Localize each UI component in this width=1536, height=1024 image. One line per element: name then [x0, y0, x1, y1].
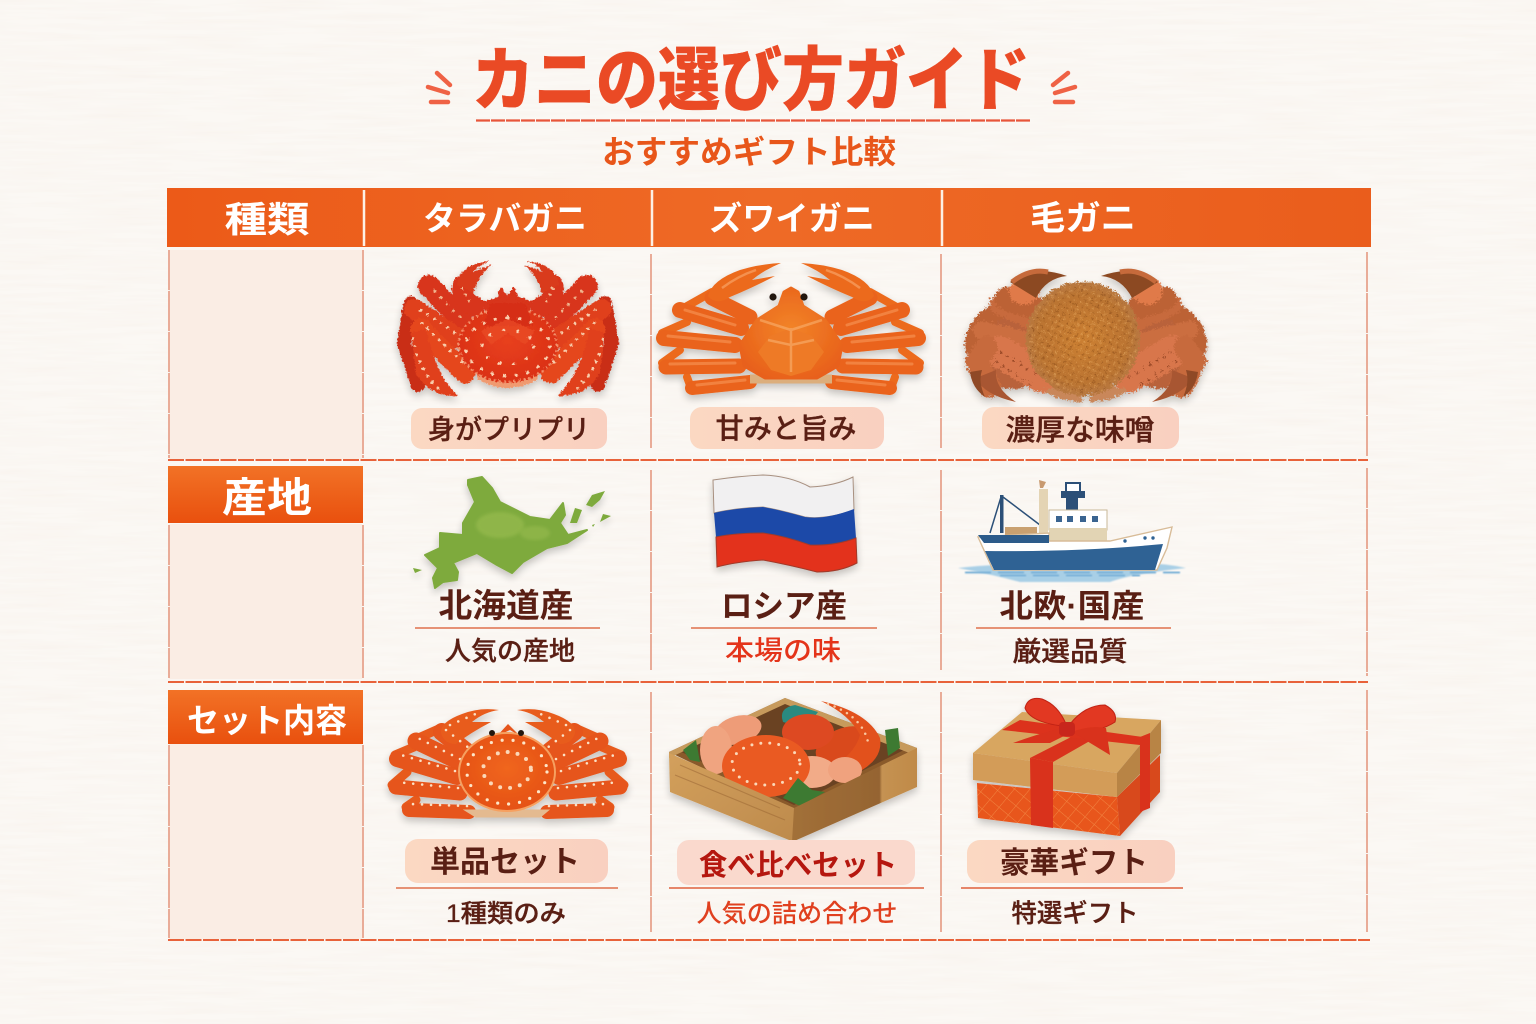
pill: 甘みと旨み: 甘みと旨み	[716, 413, 856, 444]
icon: king crab	[403, 260, 611, 395]
icon: left sparkle	[428, 73, 450, 102]
pill: 甘みと旨み	[690, 407, 884, 449]
text: 北海道産: 北海道産	[438, 587, 574, 624]
pill: 単品セット	[396, 839, 618, 928]
icon: Hokkaido map	[413, 477, 611, 588]
pill: 食べ比べセット	[669, 840, 924, 928]
comparison table frame	[168, 250, 1370, 940]
header: 毛ガニ: 毛ガニ	[1030, 200, 1136, 238]
text: 北欧・国産: 北欧·国産	[1000, 588, 1144, 624]
icon: gift box	[973, 698, 1161, 836]
pill: 単品セット: 単品セット	[430, 846, 580, 879]
text: 北欧・国産	[976, 588, 1171, 667]
pill: 食べ比べセット: 人気の詰め合わせ	[696, 900, 898, 928]
pill: 身がプリプリ: 身がプリプリ	[428, 415, 590, 445]
row label: セット内容: セット内容	[187, 702, 347, 739]
pill: 豪華ギフト: 特選ギフト	[1012, 900, 1138, 928]
pill: 豪華ギフト: 豪華ギフト	[1000, 847, 1148, 880]
icon: Russian flag	[713, 475, 857, 572]
icon: crab pincers and tips	[970, 271, 1067, 402]
pill: 食べ比べセット: 食べ比べセット	[699, 849, 897, 882]
title block	[428, 42, 1075, 170]
subtitle: おすすめギフト比較	[602, 134, 896, 170]
title underline	[476, 119, 1030, 122]
header: 種類: 種類	[224, 199, 310, 240]
text: 北欧・国産: 厳選品質	[1012, 637, 1128, 667]
pill: 濃厚な味噌: 濃厚な味噌	[1006, 414, 1154, 447]
pill: 濃厚な味噌	[982, 407, 1179, 449]
table grid lines	[168, 250, 1370, 940]
text: 北海道産	[415, 587, 600, 666]
row label: セット内容	[168, 690, 363, 744]
text: ロシア産: ロシア産	[721, 588, 847, 624]
table header band	[167, 188, 1371, 247]
icon: horsehair crab	[968, 271, 1200, 402]
left column shading	[169, 250, 362, 939]
icon: wooden assortment box	[669, 698, 917, 842]
icon: fishing boat	[958, 480, 1186, 582]
text: ロシア産: 本場の味	[725, 636, 841, 666]
row label: 産地: 産地	[222, 475, 312, 521]
icon: snow crab single	[392, 709, 624, 816]
pill: 単品セット: 1種類のみ	[446, 900, 566, 928]
icon: right sparkle	[1053, 73, 1075, 102]
text: 北海道産: 人気の産地	[445, 636, 575, 666]
icon: snow crab	[662, 263, 920, 388]
text: ロシア産	[691, 588, 877, 666]
pill: 身がプリプリ	[411, 408, 607, 449]
pill: 豪華ギフト	[961, 840, 1183, 928]
row label: 産地	[168, 466, 363, 523]
header: ズワイガニ: ズワイガニ	[709, 200, 875, 237]
title: カニの選び方ガイド	[472, 42, 1030, 119]
header: タラバガニ: タラバガニ	[423, 200, 587, 237]
